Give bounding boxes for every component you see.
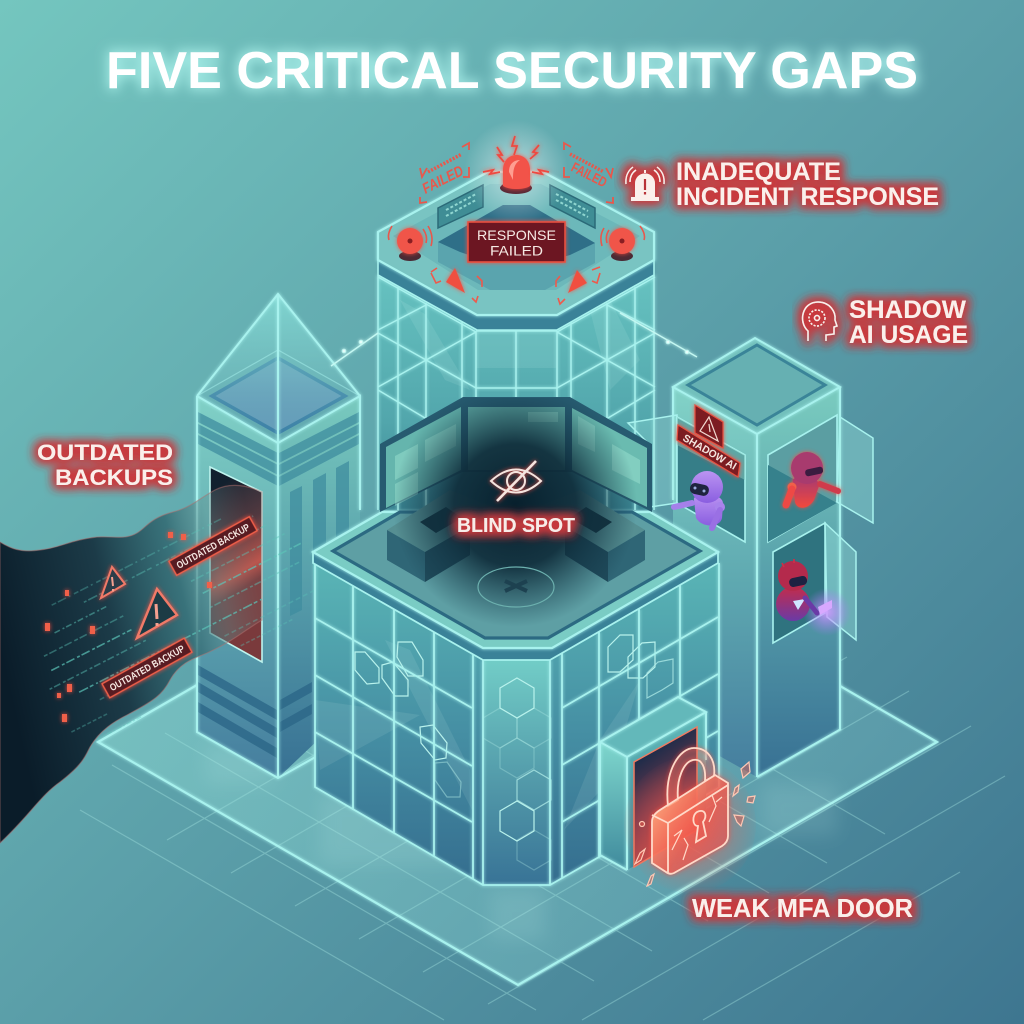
- padlock shackle: [667, 748, 714, 806]
- chair: [478, 567, 554, 607]
- red robot in lower window: [776, 559, 851, 636]
- roof well: [438, 205, 595, 290]
- label: outdated backups: OUTDATED: [37, 440, 173, 465]
- roof band: [378, 260, 654, 330]
- tower roof panel: [212, 358, 345, 433]
- connector lines between towers: [331, 313, 697, 366]
- outdated backup banner upper: OUTDATED BACKUP: [175, 522, 252, 572]
- back tower grid lines: [378, 275, 655, 510]
- chamfer corner: [483, 660, 550, 885]
- lower right window: [773, 523, 856, 643]
- left tower with pyramid roof: [197, 294, 360, 778]
- left desk: [387, 490, 500, 582]
- label: shadow AI usage: AI USAGE: [849, 321, 968, 349]
- warning triangles on roof: [431, 267, 600, 304]
- glass platform: [98, 500, 937, 985]
- roof deck: [313, 512, 718, 648]
- code fragments: [16, 492, 338, 748]
- tower window: [210, 467, 262, 662]
- right tower roof: [688, 345, 825, 425]
- red beacon: [464, 120, 568, 224]
- monitor wall: [380, 397, 652, 512]
- central building: [313, 383, 720, 885]
- response failed sign: RESPONSE: [477, 227, 556, 243]
- response failed sign: FAILED: [490, 242, 543, 258]
- crossed out eye icon: [491, 461, 541, 501]
- failed alert label right: FAILED: [569, 159, 610, 190]
- monitoring screens on roof: [438, 185, 595, 228]
- roof surface: [378, 172, 654, 315]
- response failed sign: [468, 222, 565, 262]
- icon: head with gear: [803, 302, 837, 341]
- failed alert label left: [419, 143, 469, 203]
- right wall: [550, 563, 720, 885]
- icon: alarm beacon: [626, 167, 664, 201]
- padlock body: [652, 775, 728, 874]
- purple robot: [674, 471, 725, 528]
- upper right window: [768, 415, 873, 542]
- right desk: [530, 490, 645, 582]
- label: shadow AI usage: SHADOW: [849, 296, 966, 324]
- label: weak MFA door: WEAK MFA DOOR: [692, 893, 913, 923]
- left window with glass door: [628, 415, 745, 542]
- label: outdated backups: BACKUPS: [55, 465, 173, 490]
- title: FIVE CRITICAL SECURITY GAPS: [106, 42, 918, 100]
- label: inadequate incident response: INCIDENT RESPONSE: [676, 183, 939, 211]
- lock fragments: [635, 762, 755, 886]
- right tower: [628, 338, 873, 777]
- shadow AI warning sign: [677, 405, 740, 477]
- data fragments: [45, 532, 212, 722]
- label: outdated backups: [37, 440, 173, 490]
- label: inadequate incident response: INADEQUATE: [676, 158, 841, 186]
- rim band: [313, 552, 718, 660]
- isometric floor grid: [80, 555, 1005, 1020]
- label: inadequate incident response: [676, 158, 939, 211]
- failed alert label left: FAILED: [419, 162, 467, 198]
- hexagon patterns: [355, 635, 673, 870]
- label: shadow AI usage: [849, 296, 968, 349]
- red robot in upper window: [786, 452, 838, 508]
- MFA door enclosure: [600, 697, 706, 870]
- wall grid lines: [315, 563, 720, 885]
- blind spot darkness: [396, 398, 632, 622]
- left alarm bell: [388, 226, 432, 261]
- right alarm bell: [601, 226, 644, 261]
- small warning triangle: [101, 567, 125, 598]
- shadow AI warning sign: SHADOW AI: [681, 432, 739, 473]
- cracked padlock: [624, 748, 756, 893]
- data leak smoke stream: [0, 485, 338, 843]
- left wall: [313, 563, 483, 885]
- outdated backup banner lower: OUTDATED BACKUP: [108, 644, 187, 694]
- door opening: [634, 727, 697, 867]
- back tower: [378, 120, 655, 510]
- failed alert label right: [564, 143, 613, 203]
- large warning triangle: [137, 589, 177, 638]
- label: blind spot: BLIND SPOT: [457, 515, 575, 537]
